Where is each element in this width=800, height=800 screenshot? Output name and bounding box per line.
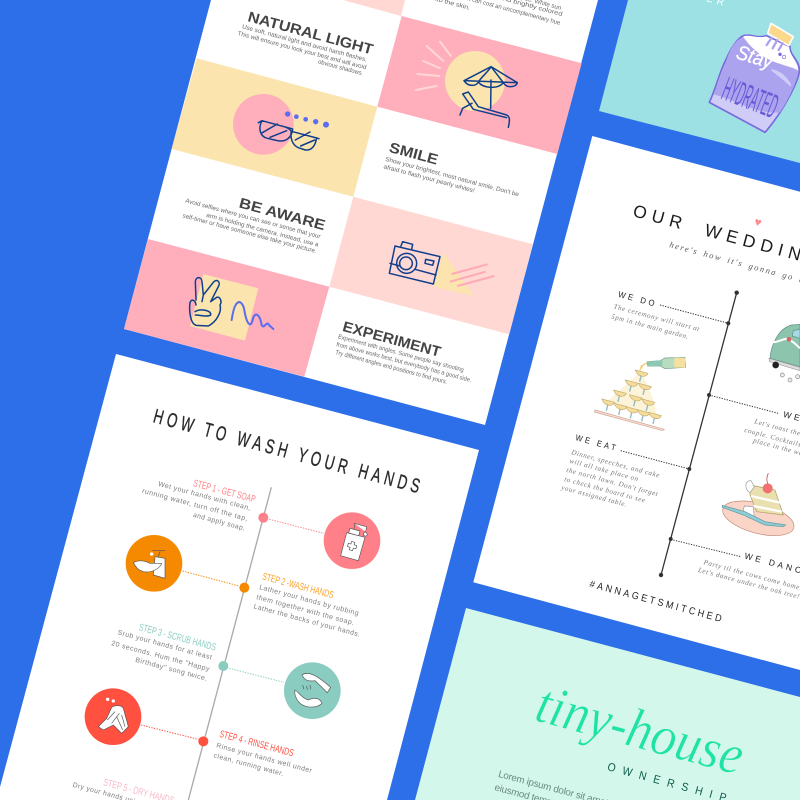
illustration: champagne tower and bottle: [594, 357, 686, 431]
text: smile: SMILE: [387, 140, 440, 169]
line: central timeline: [188, 487, 271, 800]
text: step 3: Birthday" song twice.: [134, 657, 208, 683]
cell: peace pink: [124, 239, 329, 377]
text: experiment: Experiment with angles. Some people say shooting: [337, 333, 465, 374]
title: how to wash your hands: HOW TO WASH YOUR HANDS: [151, 406, 426, 499]
text: natural light: [237, 9, 375, 77]
icon: peace hand: [190, 274, 273, 341]
icon: sunglasses: [233, 94, 329, 155]
text: step 1: STEP 1 - GET SOAP: [192, 478, 257, 506]
text: be aware: [182, 196, 327, 255]
text: step 4: STEP 4 - RINSE HANDS: [218, 729, 295, 759]
text: be aware: arm is holding the camera. Instead, use a: [205, 212, 320, 249]
illustration: cake: [719, 473, 798, 542]
text: natural light: Use soft, natural light and avoid harsh flashes.: [241, 23, 368, 64]
text: we eat: [560, 432, 661, 509]
text: step 4: [213, 729, 313, 778]
text: smile: [383, 140, 520, 198]
icons: tips panel: [190, 42, 517, 341]
text: step 2: [253, 572, 361, 639]
text: experiment: from above works best, but everybody has a good side.: [335, 341, 472, 384]
text: natural light: NATURAL LIGHT: [246, 9, 375, 58]
text: we do: WE DO: [617, 289, 658, 309]
cell: top pink fragment: [343, 0, 405, 16]
panel: water bottle: [599, 0, 800, 163]
text: step 1: running water, turn off the tap,: [141, 488, 249, 523]
text: step 3: STEP 3 - SCRUB HANDS: [138, 622, 217, 654]
text: step 3: Srub your hands for at least: [117, 629, 213, 662]
text: step 4: Rinse your hands well under: [215, 742, 313, 775]
text: be aware: BE AWARE: [237, 196, 327, 234]
step 3 node and icon: [218, 661, 341, 719]
step 4 node and icon: [85, 688, 208, 746]
cell: camera light pink: [329, 197, 533, 334]
text: we eat: Dinner, speeches, and cake: [570, 448, 661, 480]
cell: sunglasses yellow: [172, 58, 377, 197]
step 1 node and icon: [258, 512, 380, 569]
text: experiment: EXPERIMENT: [341, 319, 443, 361]
text: natural light: obvious shadows.: [317, 58, 364, 77]
text: we do: The ceremony will start at: [613, 303, 701, 333]
text: step 1: [141, 478, 257, 533]
text: step 2: Lather your hands by rubbing: [258, 584, 360, 618]
text: we eat: will all take place on: [568, 457, 640, 483]
step 2 node and icon: [126, 535, 249, 593]
text: experiment: Try different angles and positions to find yours.: [334, 349, 448, 386]
icon: camera: [389, 242, 494, 296]
text: step 2: Lather the backs of your hands.: [253, 603, 361, 639]
text: we dance: [696, 551, 800, 601]
cell: beach pink: [377, 16, 582, 154]
text: experiment: [334, 319, 472, 386]
panel: how to wash your hands: [0, 354, 479, 800]
text: step 1: Wet your hands with clean,: [157, 481, 252, 512]
text: we dance: Let's dance under the oak tree!: [696, 566, 800, 601]
text: step 3: [110, 622, 217, 683]
icon: heart: ♥: [753, 214, 763, 230]
panel: selfie tips: [124, 0, 598, 425]
text: we eat: your assigned table.: [560, 483, 628, 509]
text: we eat: WE EAT: [574, 432, 620, 453]
icon: stay hydrated bottle: [709, 23, 799, 132]
text: be aware: Avoid selfies where you can see or sense that your: [184, 197, 321, 240]
text: step 2: them together with the soap.: [255, 594, 355, 627]
text: natural light: This will ensure you look your best and will avoid: [237, 30, 368, 71]
illustration: getaway car: [769, 324, 800, 382]
icon: beach umbrella: [416, 42, 517, 127]
text: we toast: [743, 409, 800, 459]
text: smile: Show your brightest, most natural smile. Don't be: [384, 156, 520, 198]
panel: tiny house: [415, 608, 800, 800]
text: step 1: and apply soap.: [192, 512, 246, 533]
text: we eat: the north lawn. Don't forget: [565, 466, 660, 498]
text: hashtag: #ANNAGETSMITCHED: [588, 579, 725, 626]
text: top right fragment: [428, 0, 564, 27]
text: we do: 5pm in the main garden.: [610, 313, 690, 341]
title: tiny-house: tiny-house: [530, 673, 750, 787]
text: be aware: self-timer or have someone else take your picture.: [182, 212, 318, 255]
timeline and icons: [85, 487, 380, 800]
panel: our wedding: [473, 136, 800, 670]
text: we eat: to check the board to see: [563, 475, 646, 505]
text: we do: [610, 289, 701, 341]
text: step 2: STEP 2 -WASH HANDS: [261, 572, 335, 601]
text: smile: afraid to flash your pearly whites!: [383, 163, 476, 195]
text: Stay: Stay: [734, 42, 776, 74]
text: step 3: 20 seconds. Hum the "Happy: [110, 640, 211, 673]
timeline: [621, 290, 778, 577]
text: step 4: clean, running water.: [213, 752, 285, 778]
